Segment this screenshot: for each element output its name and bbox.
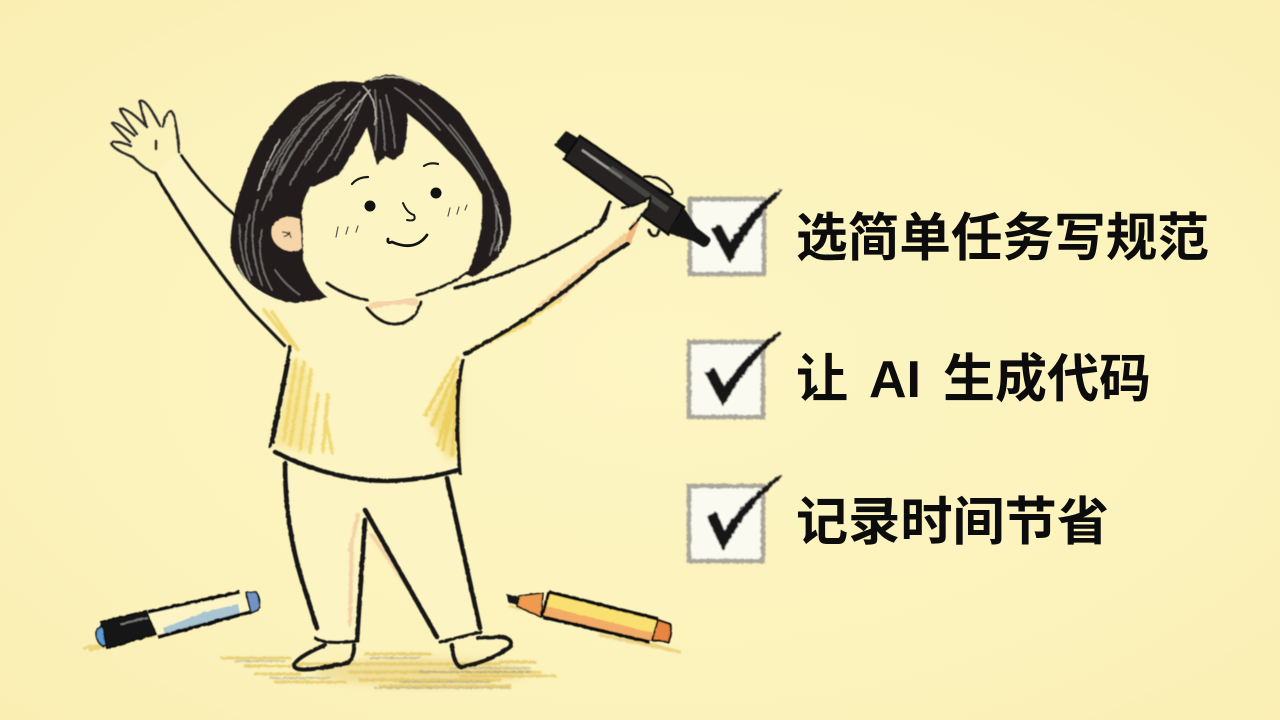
held black marker	[554, 131, 710, 247]
shirt and leg pencil shading	[264, 232, 632, 625]
label 2: AI	[869, 351, 921, 409]
checklist item 1	[690, 190, 1209, 274]
gripping hand	[603, 197, 659, 242]
face	[300, 115, 482, 301]
girl character	[111, 75, 632, 670]
checklist item 2	[689, 333, 1151, 417]
shirt	[270, 347, 290, 447]
marker clip	[643, 177, 672, 194]
head	[231, 75, 511, 324]
label 1: 选简单任务写规范	[796, 210, 1209, 268]
eyes and brows	[352, 163, 442, 212]
marker nib	[668, 208, 710, 247]
marker on floor: black and blue	[96, 592, 260, 648]
checkbox 1	[690, 190, 781, 274]
mouth	[388, 235, 427, 246]
marker barrel	[564, 136, 684, 234]
cheek marks	[336, 205, 467, 237]
marker on floor: orange	[506, 592, 671, 642]
label 3: 记录时间节省	[796, 494, 1109, 552]
outline strokes: arms, shirt, pants, feet	[111, 101, 628, 670]
label 2: 生成代码	[943, 351, 1151, 409]
jaw line	[327, 273, 467, 324]
hair	[231, 75, 511, 302]
body fill	[155, 152, 630, 642]
feet	[294, 645, 354, 670]
raised hand	[111, 101, 179, 173]
nose	[403, 203, 415, 220]
ear	[271, 217, 302, 252]
checklist item 3	[689, 476, 1109, 561]
marker cap	[554, 131, 583, 157]
pants	[285, 463, 317, 628]
checklist	[689, 190, 1209, 561]
right arm lines	[455, 203, 610, 288]
checkbox 2	[689, 333, 780, 417]
label 2: 让	[796, 351, 848, 409]
left arm lines	[181, 155, 237, 217]
checkbox 3	[689, 476, 781, 561]
floor shadow scribble	[84, 606, 680, 688]
